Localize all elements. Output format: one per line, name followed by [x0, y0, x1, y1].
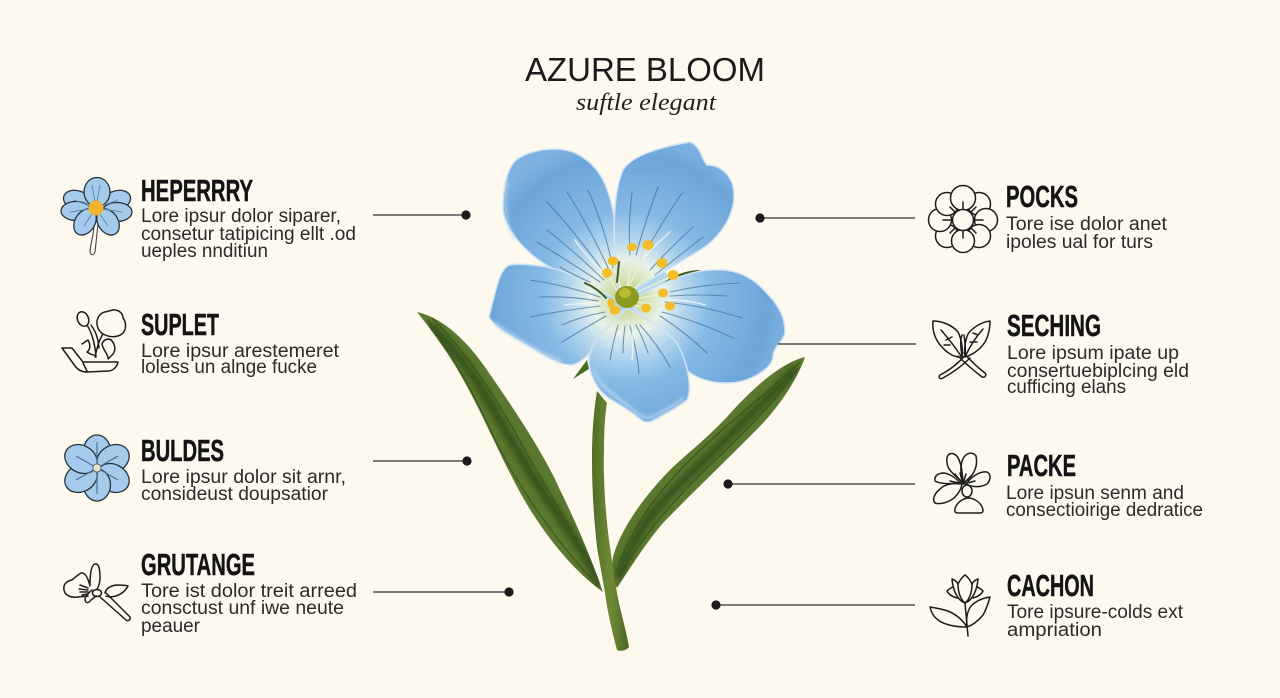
connector: heperrry — [373, 210, 471, 220]
title: AZURE BLOOM — [525, 51, 765, 88]
text block: buldes — [141, 433, 346, 505]
petal: right — [630, 270, 785, 383]
text block: heperrry: ueples nnditiun — [141, 241, 268, 262]
subtitle: suftle elegant — [576, 90, 717, 116]
text block: suplet: loless un alnge fucke — [141, 357, 317, 378]
text block: pocks: Tore ise dolor anet — [1006, 214, 1168, 235]
icon: open blossom — [934, 453, 990, 513]
icon: side flower outline — [64, 564, 130, 621]
connector: pocks — [755, 213, 915, 223]
text block: heperrry: Lore ipsur dolor siparer, — [141, 206, 341, 227]
text block: pocks — [1006, 179, 1168, 253]
rolled petal rims — [494, 180, 683, 418]
text block: seching: Lore ipsum ipate up — [1007, 343, 1179, 364]
stem — [592, 391, 629, 651]
petal veins — [530, 187, 742, 373]
connector: grutange — [373, 587, 514, 597]
right leaf — [612, 357, 805, 588]
connector: packe — [723, 479, 915, 489]
sepal — [573, 360, 589, 379]
connector: cachon — [711, 600, 915, 610]
text block: packe: consectioirige dedratice — [1006, 500, 1203, 521]
text block: pocks: POCKS — [1006, 179, 1078, 214]
icon: blue six-petal flower — [60, 435, 134, 501]
text block: cachon: ampriation — [1007, 620, 1102, 641]
text block: grutange: peauer — [141, 616, 201, 637]
icon: lotus bud with leaves — [930, 575, 990, 636]
text block: seching: cufficing elans — [1007, 377, 1126, 398]
text block: buldes: Lore ipsur dolor sit arnr, — [141, 467, 346, 488]
text block: buldes: BULDES — [141, 433, 224, 468]
text block: heperrry: consetur tatipicing ellt .od — [141, 224, 356, 245]
stamens — [585, 247, 672, 309]
text block: heperrry — [141, 173, 356, 262]
text block: seching: consertuebiplcing eld — [1007, 361, 1189, 382]
text block: grutange: Tore ist dolor treit arreed — [141, 581, 357, 602]
icon: crossed leaves — [933, 321, 990, 379]
text block: pocks: ipoles ual for turs — [1006, 232, 1153, 253]
text block: heperrry: HEPERRRY — [141, 173, 253, 208]
text block: suplet: SUPLET — [141, 307, 219, 342]
text block: buldes: consideust doupsatior — [141, 484, 329, 505]
text block: cachon — [1007, 568, 1184, 641]
text block: packe: PACKE — [1007, 448, 1076, 483]
icon: line art sprouts — [62, 310, 126, 372]
text block: seching: SECHING — [1007, 308, 1101, 343]
petal: top left — [503, 149, 618, 300]
connector: buldes — [373, 456, 472, 466]
text block: cachon: CACHON — [1007, 568, 1094, 603]
text block: grutange — [141, 547, 357, 637]
petal backing — [581, 251, 673, 343]
text block: packe — [1006, 448, 1203, 521]
text block: grutange: consctust unf iwe neute — [141, 598, 344, 619]
petal: bottom — [589, 308, 689, 422]
dark sepal behind right petal — [655, 270, 701, 290]
icon: outline rosette — [928, 186, 998, 252]
anthers — [602, 240, 678, 314]
pistil — [615, 286, 639, 308]
petal: top right — [614, 142, 734, 295]
connector: seching — [778, 343, 916, 345]
text block: cachon: Tore ipsure-colds ext — [1007, 602, 1184, 623]
left leaf — [417, 312, 603, 592]
petal: left — [489, 264, 622, 365]
text block: packe: Lore ipsun senm and — [1006, 483, 1184, 504]
text block: suplet — [141, 307, 340, 378]
icon: blue flower with stem — [60, 178, 134, 255]
central flower illustration — [417, 142, 805, 651]
text block: seching — [1007, 308, 1189, 398]
text block: grutange: GRUTANGE — [141, 547, 255, 582]
text block: suplet: Lore ipsur arestemeret — [141, 341, 340, 362]
